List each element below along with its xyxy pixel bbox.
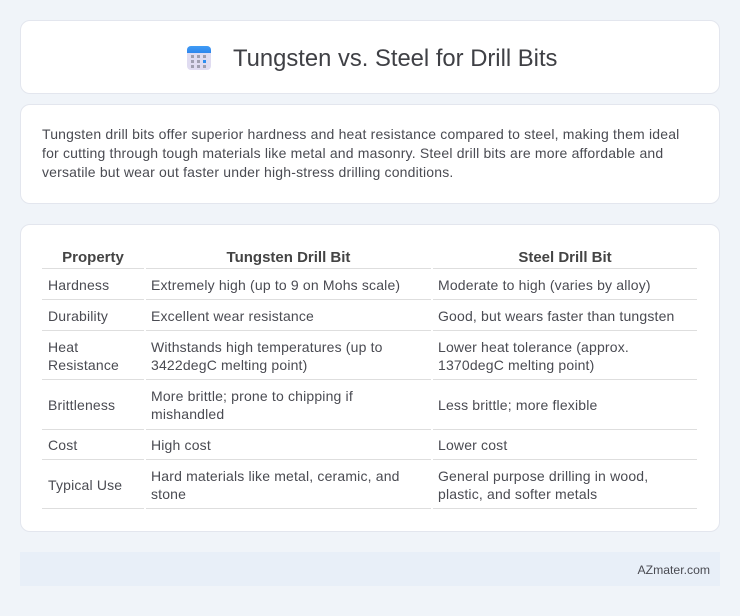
text block: summary: Tungsten drill bits offer superior hardness and heat resistance compared to steel, making them ideal	[42, 126, 679, 142]
panel: comparison table	[20, 224, 720, 532]
row: heat resistance: Heat	[48, 339, 78, 355]
row: typical use: stone	[151, 486, 186, 502]
row: heat resistance: 1370degC melting point)	[438, 357, 594, 373]
footer source text: AZmater.com	[638, 563, 710, 577]
row: brittleness: mishandled	[151, 406, 224, 422]
row: hardness: Extremely high (up to 9 on Mohs scale)	[151, 277, 400, 293]
row: brittleness: Less brittle; more flexible	[438, 397, 597, 413]
row: heat resistance: 3422degC melting point)	[151, 357, 307, 373]
panel: title card	[20, 20, 720, 94]
row: hardness	[48, 277, 651, 293]
row: cost: Lower cost	[438, 437, 507, 453]
row: heat resistance: Lower heat tolerance (approx.	[438, 339, 629, 355]
text block: summary: for cutting through tough materials like metal and masonry. Steel drill bits are more affordable and	[42, 145, 663, 161]
row: cost: High cost	[151, 437, 211, 453]
row: durability: Durability	[48, 308, 108, 324]
row: hardness: Hardness	[48, 277, 109, 293]
row: typical use: Hard materials like metal, ceramic, and	[151, 468, 400, 484]
row: durability	[48, 308, 674, 324]
table header	[62, 249, 612, 266]
row: cost: Cost	[48, 437, 77, 453]
row: heat resistance: Resistance	[48, 357, 119, 373]
row: brittleness: More brittle; prone to chipping if	[151, 388, 353, 404]
text block: summary: versatile but wear out faster under high-stress drilling conditions.	[42, 164, 453, 180]
title: Tungsten vs. Steel for Drill Bits	[233, 45, 557, 72]
row: typical use: General purpose drilling in wood,	[438, 468, 648, 484]
table header: Property	[62, 249, 124, 266]
row: brittleness: Brittleness	[48, 397, 115, 413]
table header: Tungsten Drill Bit	[227, 249, 350, 266]
row: durability: Excellent wear resistance	[151, 308, 314, 324]
row: typical use: Typical Use	[48, 477, 122, 493]
panel: summary	[20, 104, 720, 204]
row: typical use: plastic, and softer metals	[438, 486, 597, 502]
row: durability: Good, but wears faster than tungsten	[438, 308, 674, 324]
row: typical use	[48, 468, 648, 502]
row: heat resistance: Withstands high temperatures (up to	[151, 339, 383, 355]
row: cost	[48, 437, 508, 453]
footer bar	[20, 552, 720, 586]
row: hardness: Moderate to high (varies by alloy)	[438, 277, 651, 293]
text block: summary	[42, 126, 679, 180]
row: brittleness	[48, 388, 597, 422]
table header: Steel Drill Bit	[518, 249, 612, 266]
row: heat resistance	[48, 339, 629, 373]
icon: calendar	[187, 46, 211, 70]
